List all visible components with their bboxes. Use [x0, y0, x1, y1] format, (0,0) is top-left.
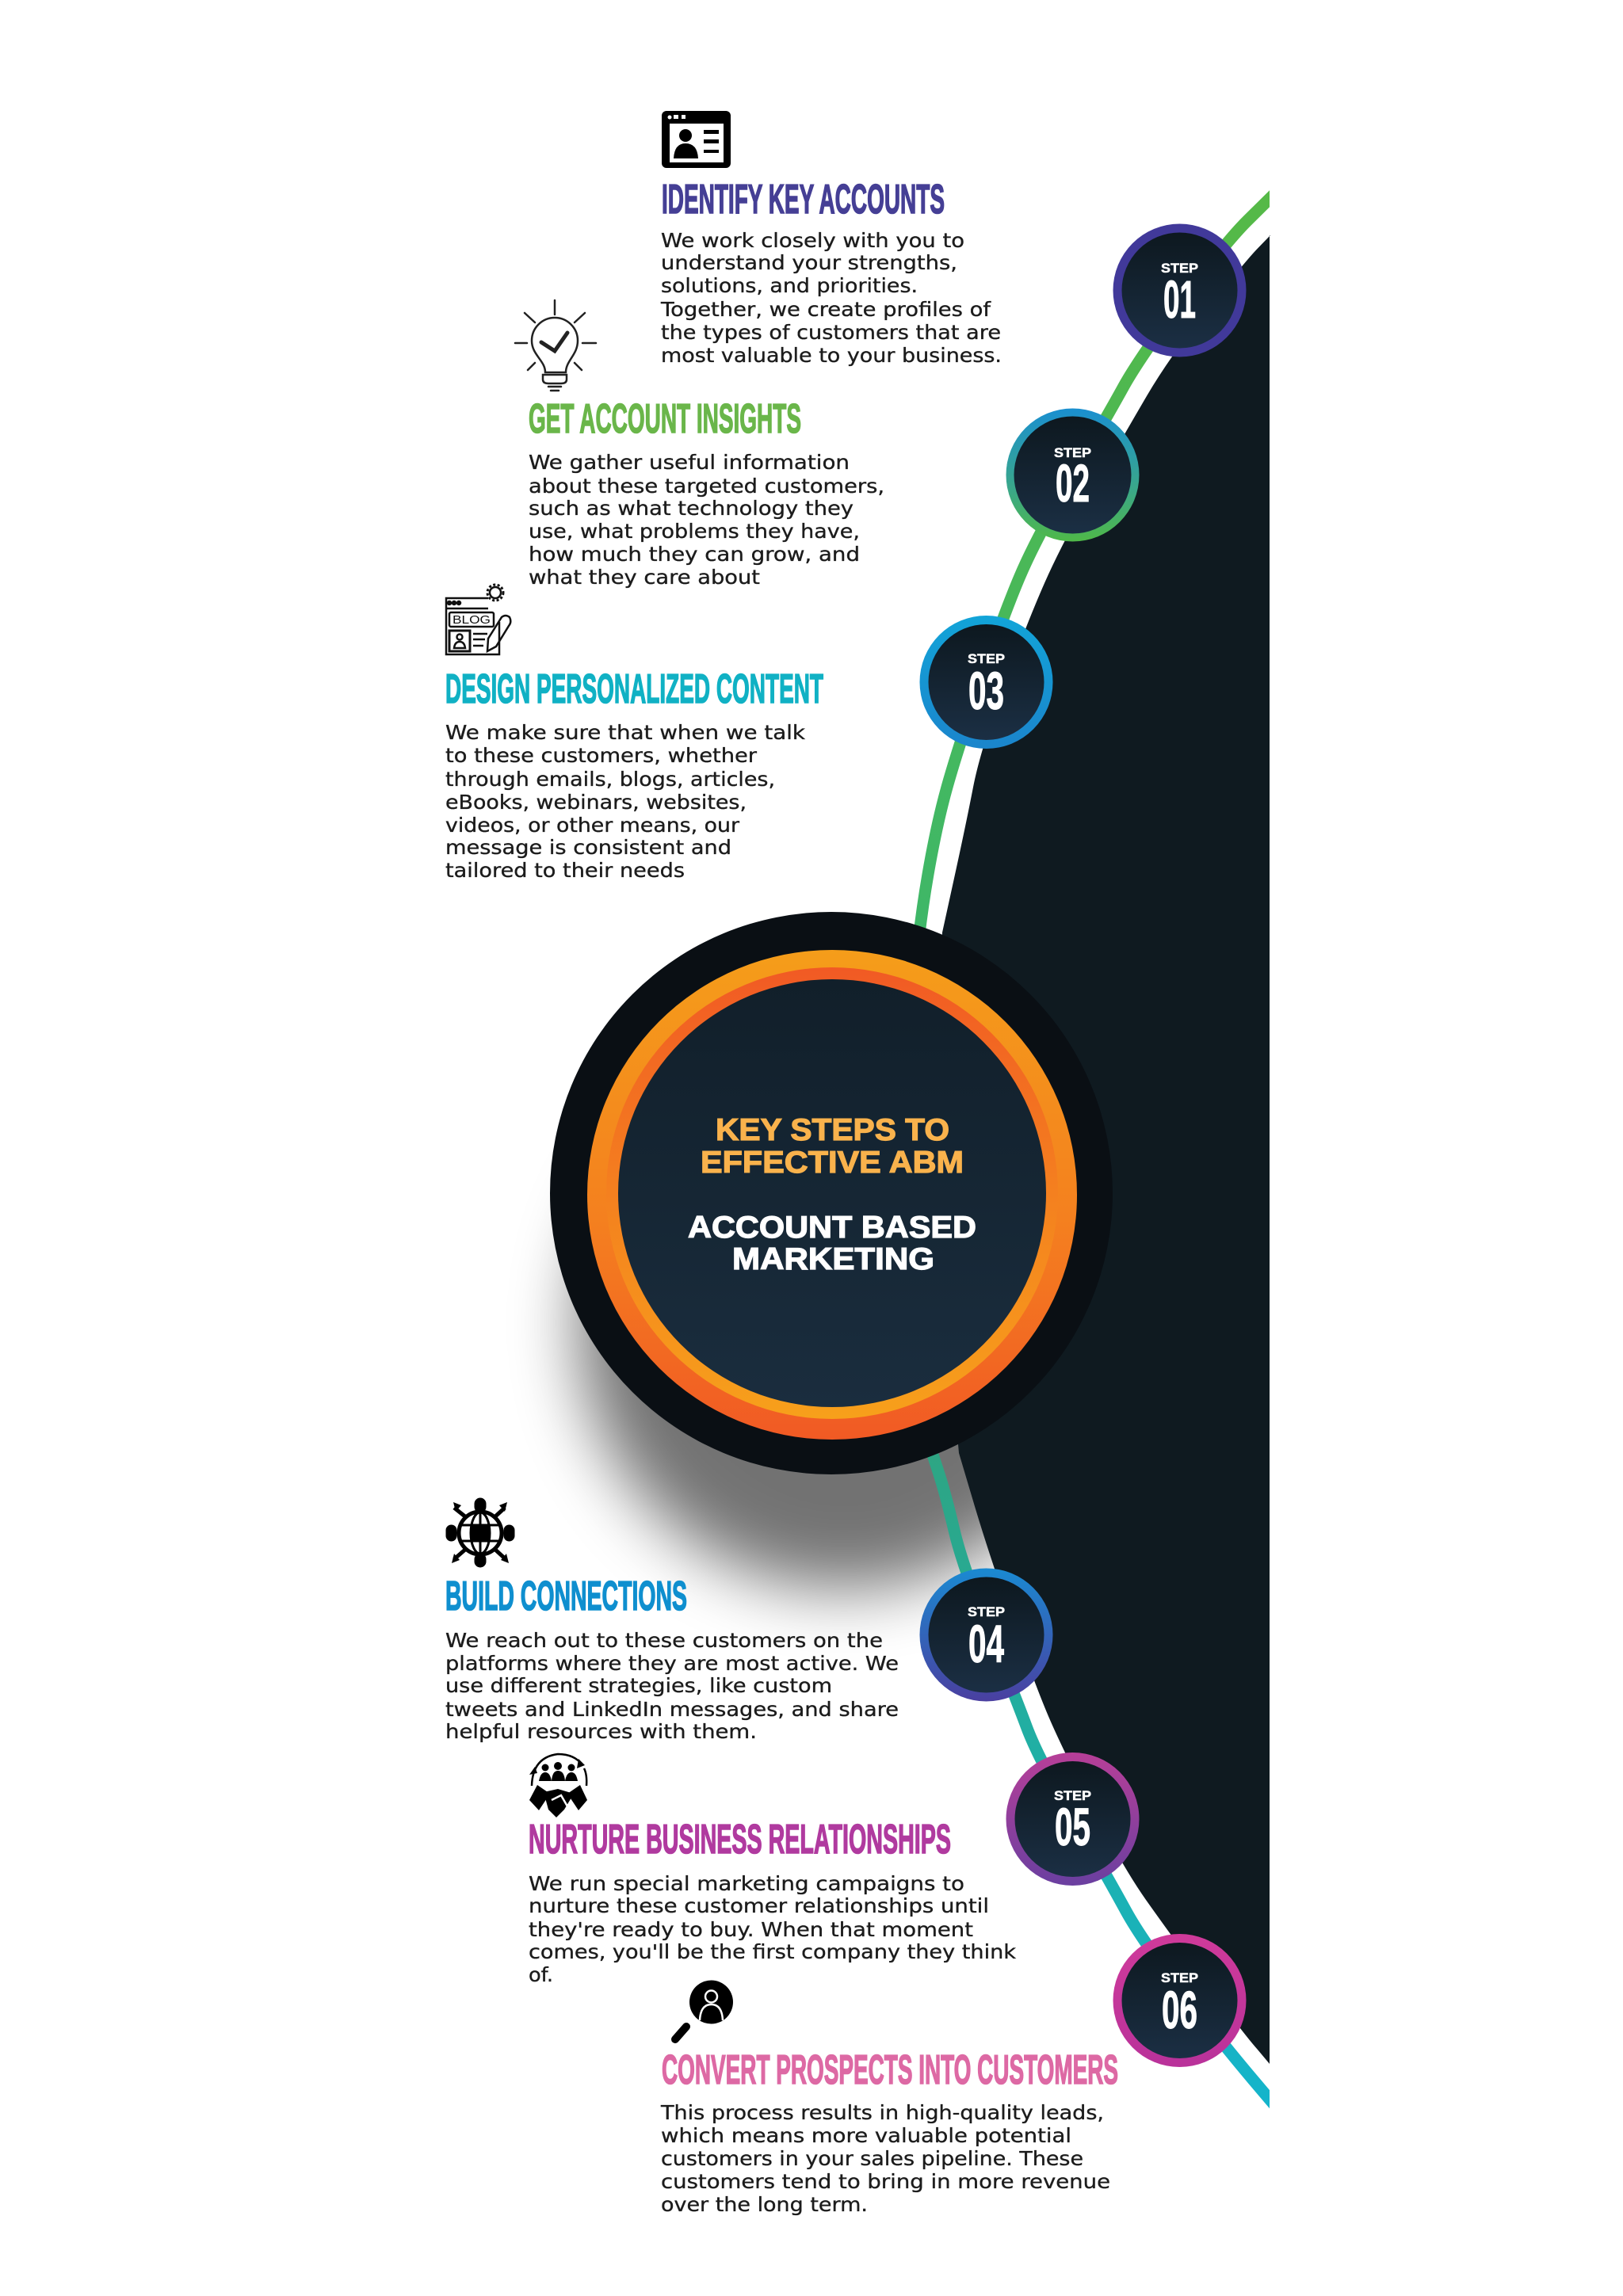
body text: [529, 451, 884, 589]
heading: NURTURE BUSINESS RELATIONSHIPS: [529, 1817, 951, 1863]
central title: EFFECTIVE ABM: [701, 1146, 964, 1180]
body text: [660, 2101, 1110, 2216]
body text: through emails, blogs, articles,: [445, 768, 775, 791]
body text: [445, 721, 806, 882]
body text: comes, you'll be the first company they think: [529, 1940, 1017, 1963]
body text: of.: [529, 1963, 553, 1986]
body text: videos, or other means, our: [445, 814, 740, 837]
icon: blog window with pencil: BLOG: [453, 613, 491, 627]
body text: customers tend to bring in more revenue: [661, 2170, 1110, 2193]
heading: BUILD CONNECTIONS: [445, 1573, 687, 1619]
body text: platforms where they are most active. We: [445, 1652, 899, 1675]
step 02 badge: STEP: [1054, 445, 1091, 460]
body text: We make sure that when we talk: [445, 721, 806, 744]
body text: helpful resources with them.: [445, 1720, 757, 1743]
central title: MARKETING: [732, 1242, 934, 1276]
body text: [529, 1872, 1017, 1986]
body text: message is consistent and: [445, 836, 731, 859]
icon: handshake with team: [529, 1754, 587, 1817]
body text: We work closely with you to: [661, 229, 964, 252]
section 2: get account insights: [529, 396, 884, 589]
body text: such as what technology they: [529, 497, 854, 520]
step 05 badge: [1006, 1753, 1140, 1886]
body text: tweets and LinkedIn messages, and share: [445, 1698, 899, 1721]
body text: We run special marketing campaigns to: [529, 1872, 964, 1895]
body text: [445, 1629, 899, 1743]
icon: magnifier with person: [675, 1981, 733, 2039]
central circle: [550, 912, 1113, 1474]
body text: they're ready to buy. When that moment: [529, 1918, 973, 1941]
step 04 badge: 04: [968, 1615, 1004, 1674]
body text: what they care about: [529, 566, 760, 589]
body text: use different strategies, like custom: [445, 1674, 832, 1697]
step 06 badge: 06: [1162, 1981, 1197, 2040]
step 03 badge: STEP: [968, 651, 1005, 666]
step 06 badge: [1113, 1934, 1246, 2067]
step 05 badge: 05: [1055, 1798, 1090, 1857]
step 02 badge: 02: [1056, 454, 1090, 513]
section 3: design personalized content: [445, 666, 823, 882]
body text: nurture these customer relationships until: [529, 1894, 989, 1917]
body text: over the long term.: [661, 2193, 868, 2216]
icon: blog window with pencil: [446, 585, 510, 654]
body text: which means more valuable potential: [661, 2124, 1071, 2147]
body text: to these customers, whether: [445, 744, 758, 767]
section 6: convert prospects into customers: [660, 2047, 1118, 2216]
section 5: nurture business relationships: [529, 1817, 1017, 1986]
central title: ACCOUNT BASED: [688, 1211, 976, 1245]
body text: This process results in high-quality leads,: [660, 2101, 1104, 2124]
body text: most valuable to your business.: [661, 344, 1002, 367]
shadow under central circle: [579, 1058, 1109, 1589]
step 04 badge: [919, 1569, 1052, 1702]
icon: id card window: [662, 111, 731, 168]
section 4: build connections: [445, 1573, 899, 1743]
heading: CONVERT PROSPECTS INTO CUSTOMERS: [662, 2047, 1118, 2093]
green timeline curve: [915, 185, 1284, 974]
step 03 badge: [919, 616, 1052, 749]
icon: globe network: [447, 1499, 514, 1566]
heading: IDENTIFY KEY ACCOUNTS: [662, 177, 945, 223]
heading: DESIGN PERSONALIZED CONTENT: [445, 666, 823, 712]
step 01 badge: STEP: [1161, 261, 1198, 276]
central title: KEY STEPS TO: [716, 1113, 949, 1147]
section 1: identify key accounts: [660, 177, 1002, 367]
body text: solutions, and priorities.: [661, 274, 918, 297]
icon: light bulb with check: [515, 300, 596, 391]
body text: tailored to their needs: [445, 859, 685, 882]
body text: how much they can grow, and: [529, 543, 860, 566]
step 05 badge: STEP: [1054, 1788, 1091, 1803]
body text: the types of customers that are: [661, 321, 1001, 344]
heading: GET ACCOUNT INSIGHTS: [529, 396, 801, 442]
central title: [688, 1113, 976, 1276]
step 06 badge: STEP: [1161, 1970, 1198, 1985]
step 03 badge: 03: [968, 662, 1004, 721]
body text: customers in your sales pipeline. These: [661, 2147, 1083, 2170]
body text: use, what problems they have,: [529, 520, 860, 543]
step 01 badge: [1113, 223, 1246, 357]
body text: Together, we create profiles of: [660, 298, 991, 321]
teal timeline curve: [931, 1450, 1280, 2111]
step 04 badge: STEP: [968, 1604, 1005, 1619]
body text: eBooks, webinars, websites,: [445, 791, 747, 814]
dark curved panel: [935, 235, 1270, 2064]
step 01 badge: 01: [1163, 270, 1196, 330]
body text: about these targeted customers,: [529, 475, 884, 498]
body text: [660, 229, 1002, 367]
body text: We gather useful information: [529, 451, 850, 474]
body text: We reach out to these customers on the: [445, 1629, 883, 1652]
step 02 badge: [1006, 409, 1140, 542]
body text: understand your strengths,: [661, 251, 957, 274]
